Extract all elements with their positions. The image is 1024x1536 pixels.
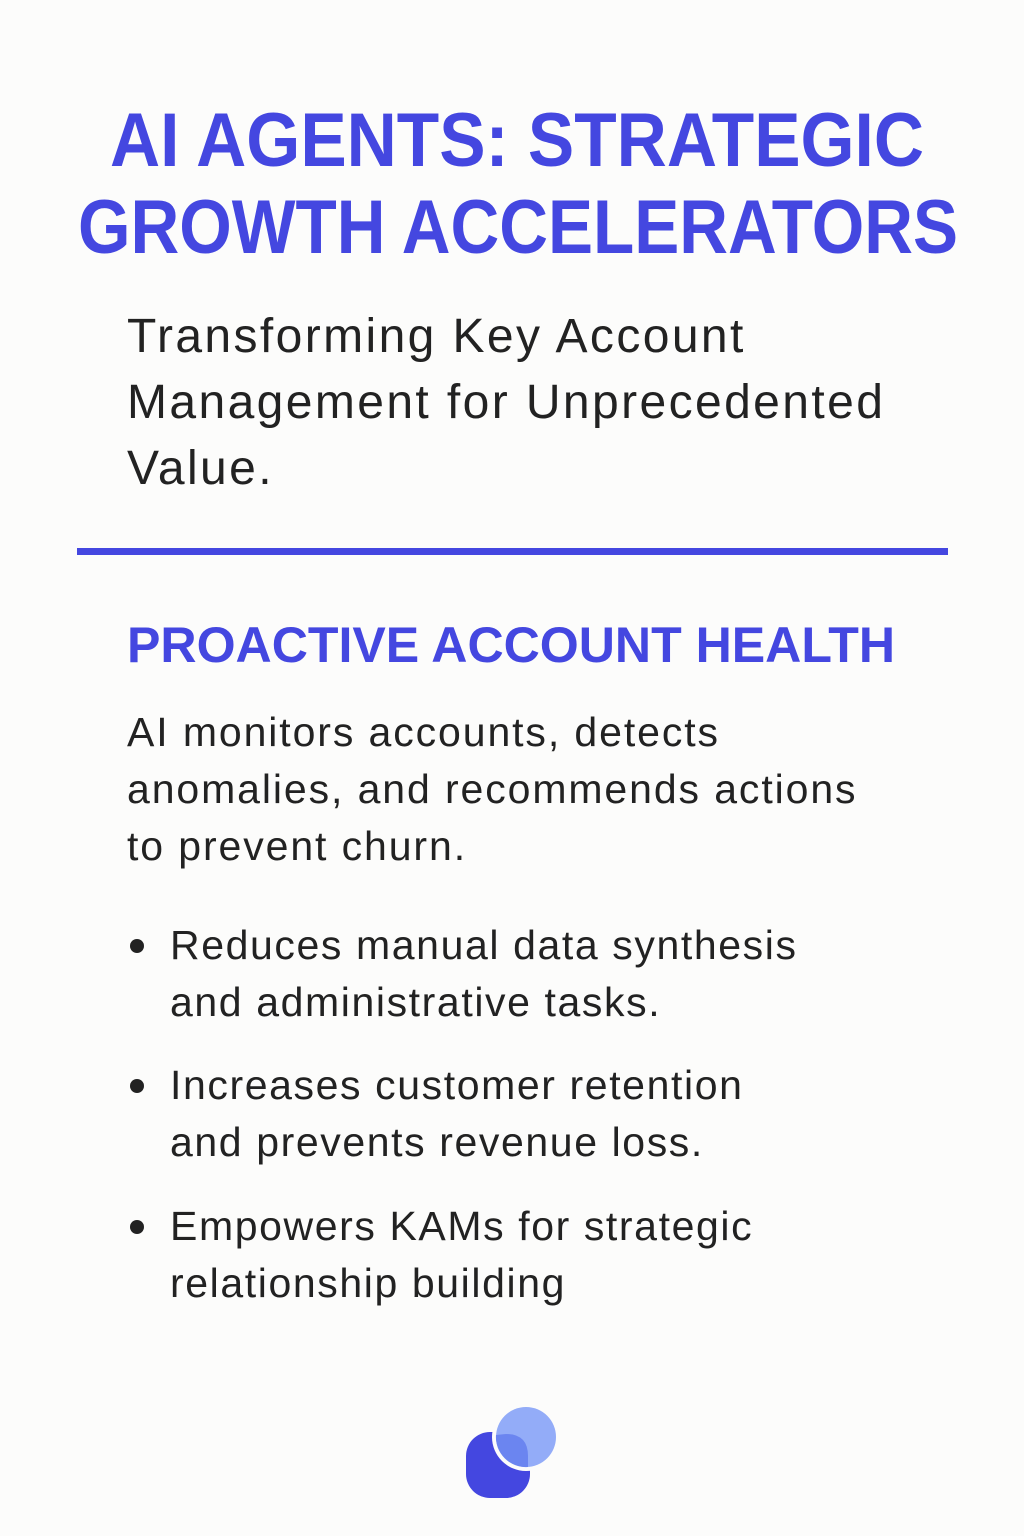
body text: to prevent churn. xyxy=(127,823,467,869)
body text: AI monitors accounts, detects xyxy=(127,709,720,755)
title: AI AGENTS: STRATEGIC xyxy=(110,98,924,183)
bullet list xyxy=(130,922,798,1306)
body text: anomalies, and recommends actions xyxy=(127,766,857,812)
subtitle: Transforming Key Account xyxy=(127,310,746,363)
bullet 1: Reduces manual data synthesis xyxy=(170,922,798,968)
body text xyxy=(127,709,857,869)
title xyxy=(78,98,958,270)
section heading: PROACTIVE ACCOUNT HEALTH xyxy=(127,617,895,673)
bullet 3: Empowers KAMs for strategic xyxy=(170,1203,753,1249)
bullet 2: and prevents revenue loss. xyxy=(170,1119,704,1165)
divider xyxy=(77,548,948,555)
bullet 3 xyxy=(130,1203,753,1306)
subtitle: Value. xyxy=(127,442,274,495)
bullet 1 xyxy=(130,922,798,1025)
subtitle xyxy=(127,310,885,495)
bullet 3: relationship building xyxy=(170,1260,566,1306)
icon: logo xyxy=(466,1407,556,1498)
subtitle: Management for Unprecedented xyxy=(127,376,885,429)
bullet 1: and administrative tasks. xyxy=(170,979,661,1025)
bullet 2: Increases customer retention xyxy=(170,1062,744,1108)
bullet 2 xyxy=(130,1062,744,1165)
